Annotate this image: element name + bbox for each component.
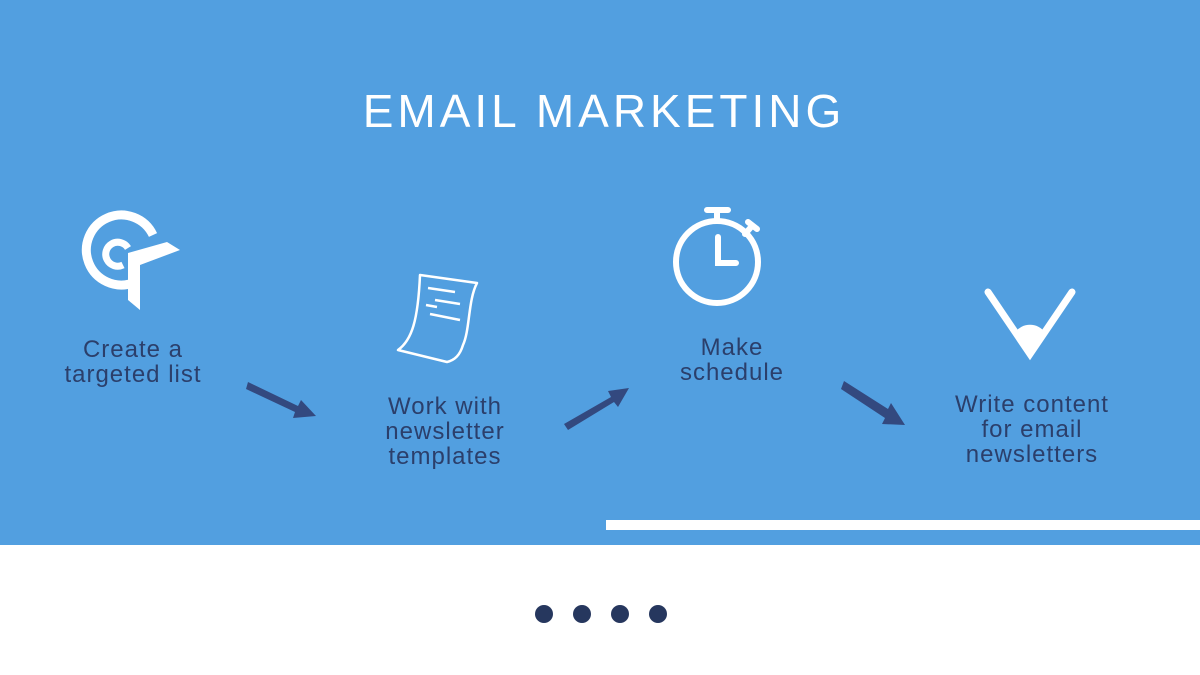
text: step 3	[680, 334, 784, 386]
icon: target	[86, 215, 180, 310]
title: EMAIL MARKETING	[363, 85, 845, 137]
text: step 4: Write content	[955, 391, 1109, 418]
text: step 1: Create a	[83, 336, 183, 363]
text: step 2: Work with	[388, 393, 502, 420]
text: step 2	[385, 393, 505, 470]
arrow 1	[246, 382, 316, 418]
text: step 2: newsletter	[385, 418, 505, 445]
icon: stopwatch	[676, 210, 758, 303]
text: step 2: templates	[388, 443, 502, 470]
arrow 2	[564, 388, 629, 430]
arrow 3	[841, 381, 905, 425]
text: step 4: for email	[981, 416, 1083, 443]
pagination dots	[535, 605, 667, 623]
text: step 3: schedule	[680, 359, 784, 386]
divider line	[606, 520, 1200, 530]
text: step 4	[955, 391, 1109, 468]
icon: pen nib	[988, 292, 1072, 356]
text: step 4: newsletters	[966, 441, 1098, 468]
text: step 1: targeted list	[64, 361, 202, 388]
text: step 3: Make	[701, 334, 763, 361]
icon: document	[398, 275, 477, 362]
text: step 1	[64, 336, 202, 388]
